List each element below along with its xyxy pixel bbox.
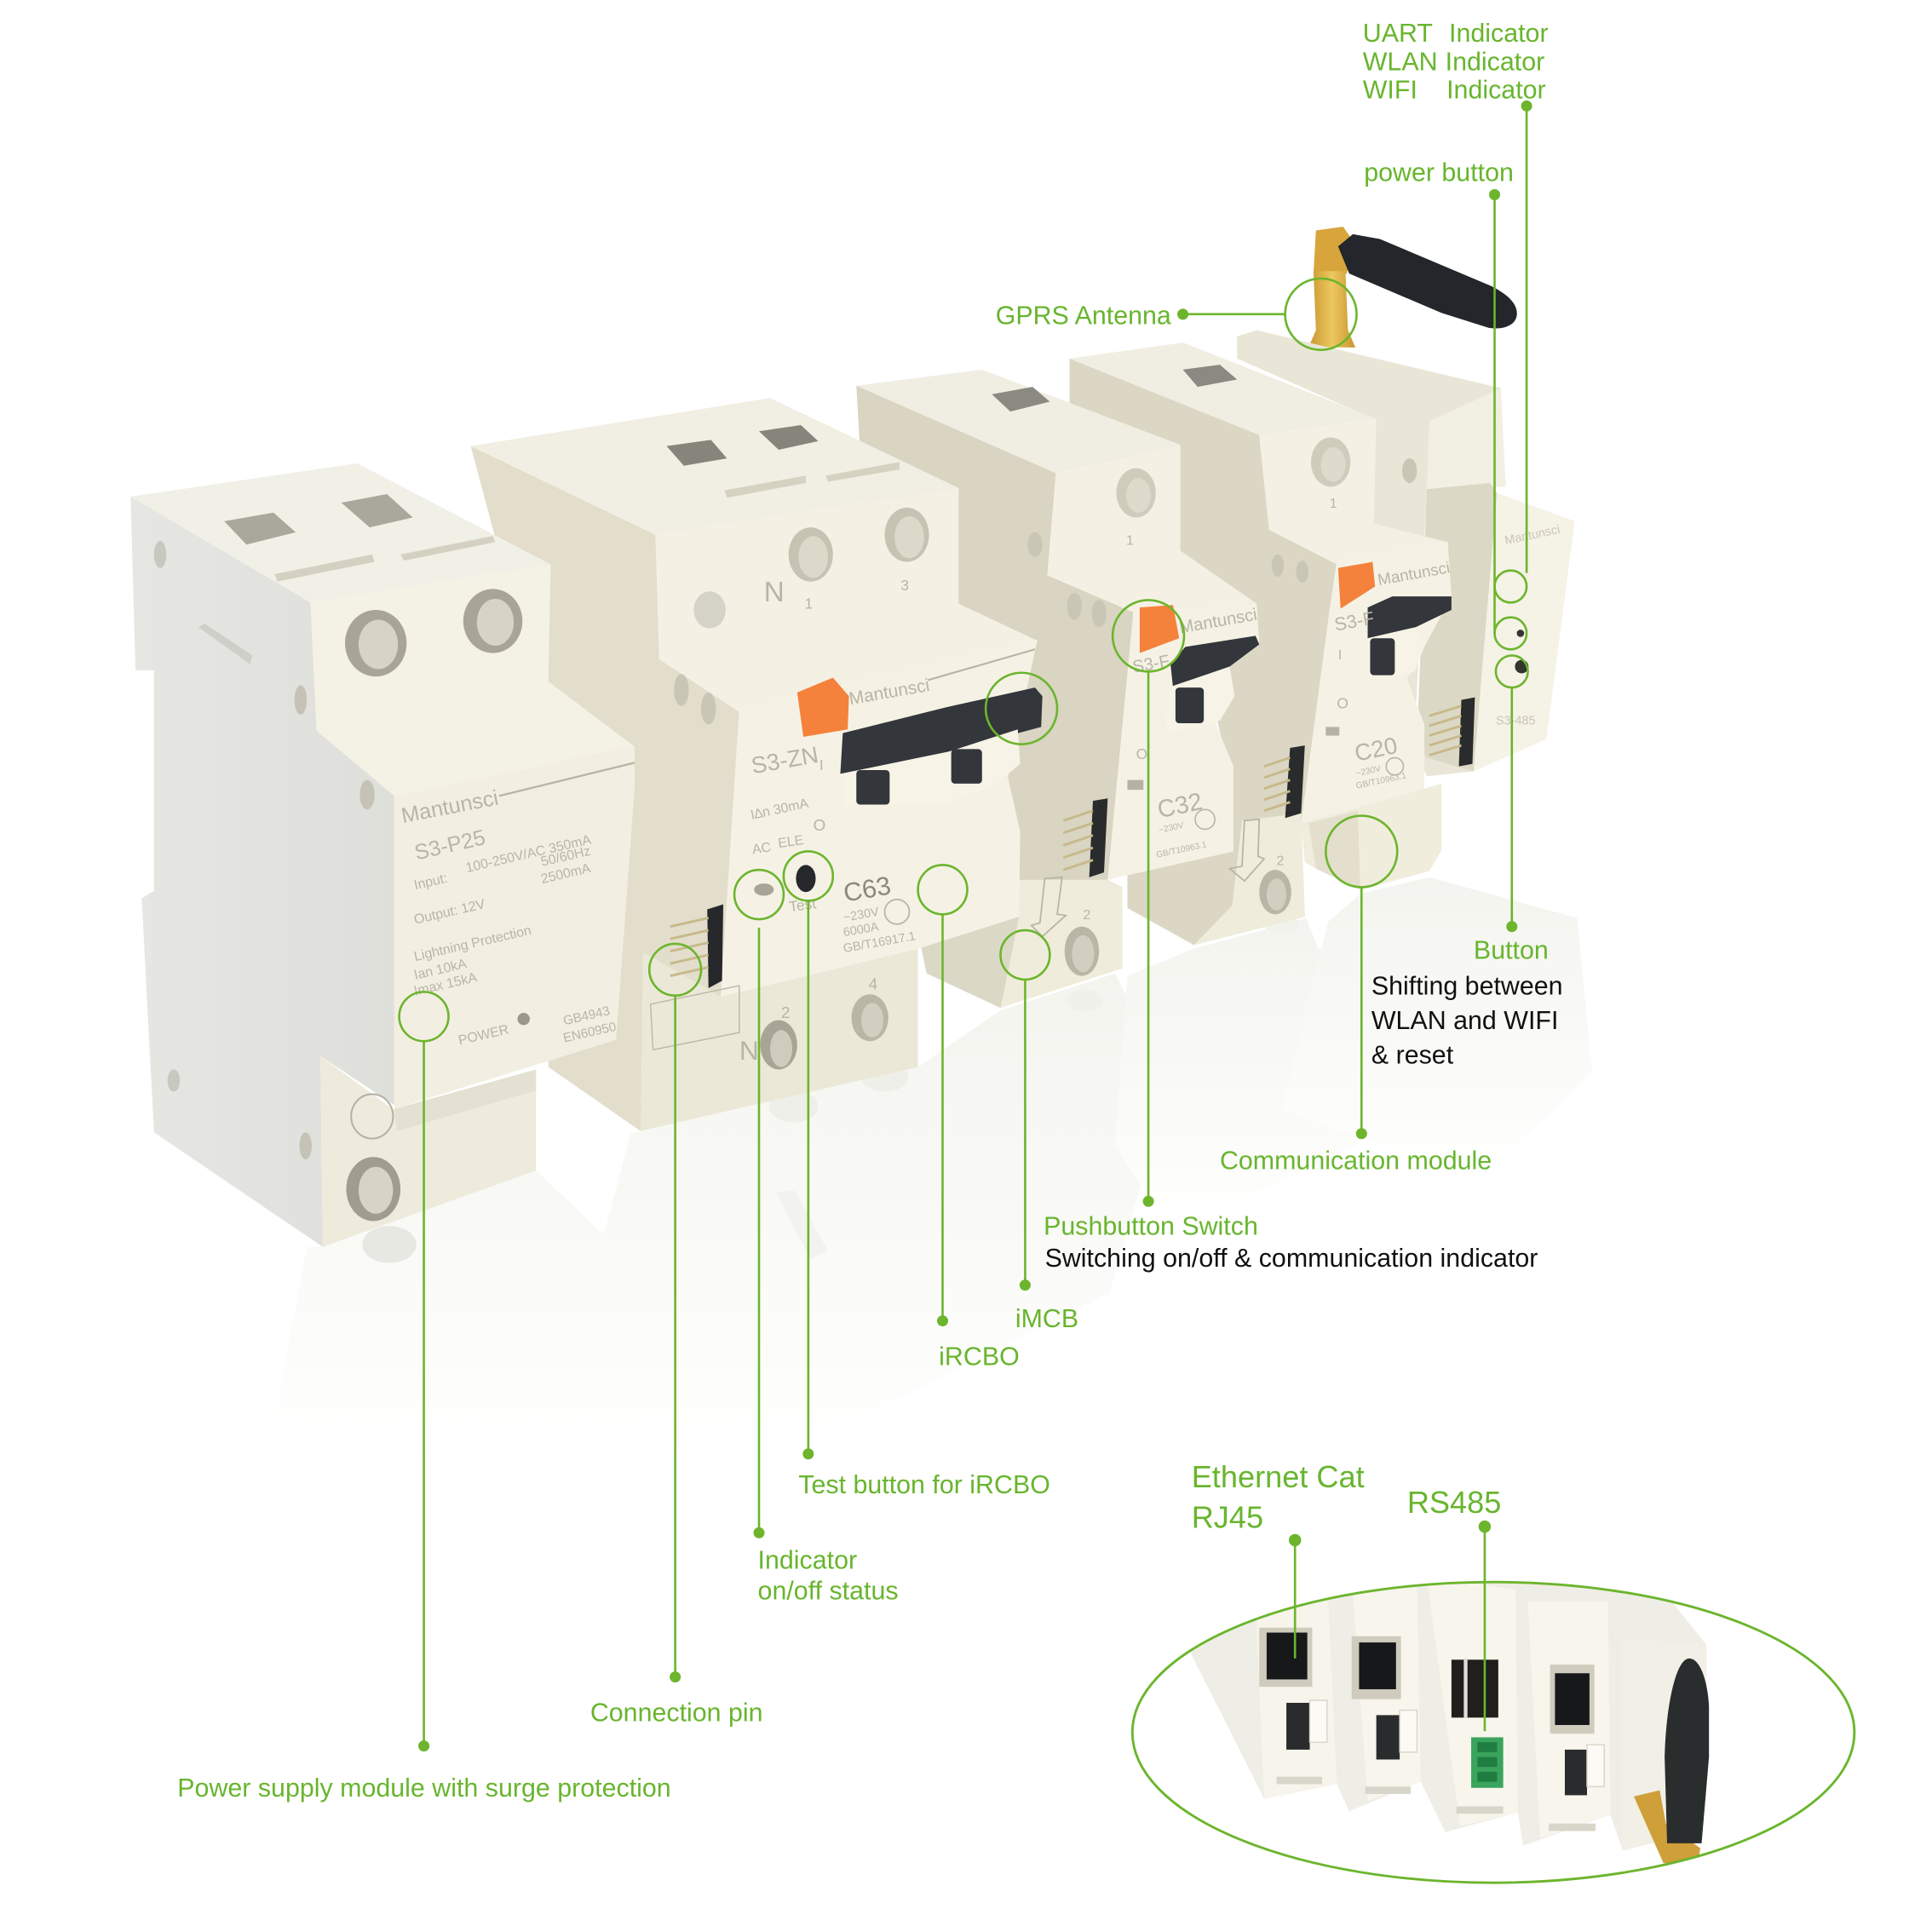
callout: RS485: RS485 bbox=[1407, 1485, 1501, 1520]
module: C32 breaker: C32 bbox=[1155, 788, 1205, 824]
module: S3-P25 power supply: Ian 10kA bbox=[413, 957, 469, 983]
inset: clipped module row bbox=[1190, 1565, 1709, 1863]
callout: pushbutton switch: Switching on/off & communication indicator bbox=[1045, 1244, 1538, 1273]
callout: button shifting WLAN and WIFI: Button bbox=[1474, 935, 1549, 964]
callout: iMCB bbox=[1000, 930, 1078, 1333]
callout: indicator status: on/off status bbox=[758, 1576, 899, 1605]
callout: UART WLAN WIFI indicators: WLAN bbox=[1363, 47, 1438, 76]
module: S3-P25 power supply: EN60950 bbox=[562, 1020, 618, 1046]
module: S3-ZN C63 breaker: ~230V bbox=[842, 906, 880, 925]
module: C20 breaker: O bbox=[1337, 695, 1348, 712]
module: S3-ZN C63 breaker: 2 bbox=[781, 1003, 791, 1021]
module: S3-ZN C63 breaker: 3 bbox=[900, 577, 909, 594]
module: C20 breaker: I bbox=[1338, 648, 1342, 663]
inset: antenna bbox=[1634, 1659, 1709, 1863]
callout: GPRS antenna bbox=[996, 279, 1357, 350]
module: S3-P25 power supply: Lightning Protection bbox=[413, 923, 532, 964]
callout: RS485 bbox=[1407, 1485, 1501, 1731]
callout: UART WLAN WIFI indicators: WIFI bbox=[1363, 76, 1417, 105]
callout: power supply module bbox=[177, 992, 671, 1803]
callout: Ethernet RJ45: RJ45 bbox=[1192, 1500, 1263, 1535]
module: C20 breaker: GB/T10963.1 bbox=[1355, 771, 1407, 791]
module: S3-ZN C63 breaker: AC bbox=[751, 840, 772, 857]
module: S3-P25 power supply: Mantunsci bbox=[400, 786, 500, 828]
module: S3-P25 power supply: Imax 15kA bbox=[413, 970, 479, 999]
module: C32 breaker: ~230V bbox=[1158, 821, 1185, 836]
module: S3-ZN C63 breaker: S3-ZN bbox=[749, 741, 820, 779]
callout: communication module bbox=[1220, 816, 1492, 1176]
callout: GPRS antenna: GPRS Antenna bbox=[996, 301, 1171, 330]
module: C32 breaker: S3-F bbox=[1131, 652, 1171, 677]
module: S3-ZN C63 breaker: 4 bbox=[869, 975, 877, 992]
module: S3-ZN C63 breaker: 6000A bbox=[842, 920, 880, 940]
callout: iRCBO bbox=[918, 865, 1020, 1371]
module: C32 breaker: 1 bbox=[1126, 533, 1134, 548]
callout: UART WLAN WIFI indicators: Indicator bbox=[1449, 19, 1549, 48]
module: S3-ZN C63 breaker: C63 bbox=[842, 872, 893, 908]
module: S3-P25 power supply: S3-P25 bbox=[412, 825, 487, 865]
callout: test button: Test button for iRCBO bbox=[798, 1470, 1050, 1499]
antenna on communication module bbox=[1308, 227, 1517, 348]
module: C20 breaker: C20 bbox=[1352, 732, 1400, 767]
module: S3-ZN C63 breaker: Mantunsci bbox=[848, 676, 931, 709]
module: C32 breaker: 2 bbox=[1083, 908, 1090, 923]
module: S3-ZN C63 breaker: N bbox=[739, 1035, 759, 1066]
product reflection bbox=[268, 877, 1592, 1466]
module: C20 breaker: Mantunsci bbox=[1377, 558, 1452, 589]
module: S3-ZN C63 breaker: ELE bbox=[777, 833, 804, 851]
module: S3-ZN C63 breaker: I bbox=[819, 756, 824, 773]
callout: button shifting WLAN and WIFI: WLAN and WIFI bbox=[1371, 1006, 1558, 1035]
module: S3-ZN C63 breaker bbox=[471, 398, 1043, 1131]
module: C32 breaker: GB/T10963.1 bbox=[1156, 840, 1208, 860]
module: communication module: Mantunsci bbox=[1504, 523, 1561, 548]
callout: connection pin: Connection pin bbox=[590, 1699, 763, 1728]
module: S3-P25 power supply: Input: bbox=[413, 871, 449, 893]
inset: RS485 module bbox=[1452, 1659, 1504, 1788]
module: S3-ZN C63 breaker: GB/T16917.1 bbox=[842, 929, 917, 956]
callout: power button bbox=[1364, 158, 1527, 649]
callout: power supply module: Power supply module with surge protection bbox=[177, 1774, 671, 1803]
callout: communication module: Communication module bbox=[1220, 1147, 1492, 1176]
module: C32 breaker: O bbox=[1136, 745, 1147, 762]
module: S3-P25 power supply: 2500mA bbox=[540, 861, 592, 887]
module: C32 breaker: Mantunsci bbox=[1178, 606, 1258, 637]
callout: connection pin bbox=[590, 944, 763, 1728]
module: S3-ZN C63 breaker: N bbox=[764, 577, 785, 608]
module: C20 breaker: ~230V bbox=[1355, 764, 1382, 779]
callout: indicator status bbox=[734, 870, 899, 1605]
callout: iMCB: iMCB bbox=[1015, 1304, 1078, 1333]
module: S3-P25 power supply: 100-250V/AC 350mA bbox=[464, 833, 593, 876]
module: C20 breaker: S3-F bbox=[1332, 607, 1376, 635]
module: S3-ZN C63 breaker: 1 bbox=[805, 595, 813, 612]
callout: UART WLAN WIFI indicators: Indicator bbox=[1446, 76, 1546, 105]
callout: UART WLAN WIFI indicators bbox=[1363, 19, 1549, 602]
module: S3-P25 power supply: Output: 12V bbox=[413, 897, 486, 928]
module: communication module: S3-485 bbox=[1496, 715, 1536, 728]
module: S3-ZN C63 breaker: Test bbox=[788, 894, 817, 915]
callout: button shifting WLAN and WIFI: & reset bbox=[1371, 1040, 1454, 1069]
callout: power button: power button bbox=[1364, 158, 1514, 187]
module: S3-P25 power supply bbox=[130, 463, 635, 1247]
callout: button shifting WLAN and WIFI: Shifting between bbox=[1371, 971, 1563, 1000]
inset: port module D bbox=[1550, 1665, 1604, 1795]
callout: UART WLAN WIFI indicators: UART bbox=[1363, 19, 1433, 48]
marker: handle circle bbox=[986, 673, 1057, 745]
module: C20 breaker bbox=[1070, 342, 1452, 945]
module: S3-ZN C63 breaker: O bbox=[814, 816, 825, 834]
module: S3-P25 power supply: POWER bbox=[457, 1022, 510, 1048]
inset: port module B bbox=[1352, 1636, 1417, 1760]
module: C32 breaker bbox=[856, 370, 1259, 1008]
callout: test button bbox=[784, 851, 1050, 1499]
module: S3-ZN C63 breaker: I∆n 30mA bbox=[750, 796, 810, 823]
callout: Ethernet RJ45 bbox=[1192, 1459, 1365, 1659]
callout: indicator status: Indicator bbox=[758, 1545, 857, 1574]
module: C20 breaker: 2 bbox=[1276, 854, 1285, 868]
callout: iRCBO: iRCBO bbox=[939, 1343, 1020, 1371]
module: S3-P25 power supply: 50/60Hz bbox=[540, 844, 592, 870]
callout: button shifting WLAN and WIFI bbox=[1371, 656, 1563, 1069]
callout: UART WLAN WIFI indicators: Indicator bbox=[1446, 47, 1544, 76]
module: communication module bbox=[1237, 331, 1575, 776]
module: C20 breaker: 1 bbox=[1330, 497, 1337, 511]
callout: Ethernet RJ45: Ethernet Cat bbox=[1192, 1459, 1365, 1494]
inset: port module A bbox=[1259, 1628, 1327, 1750]
callout: pushbutton switch: Pushbutton Switch bbox=[1044, 1211, 1258, 1240]
inset ellipse: rear ports bbox=[1132, 1565, 1854, 1883]
module: S3-P25 power supply: GB4943 bbox=[562, 1003, 612, 1028]
callout: pushbutton switch bbox=[1044, 600, 1538, 1273]
